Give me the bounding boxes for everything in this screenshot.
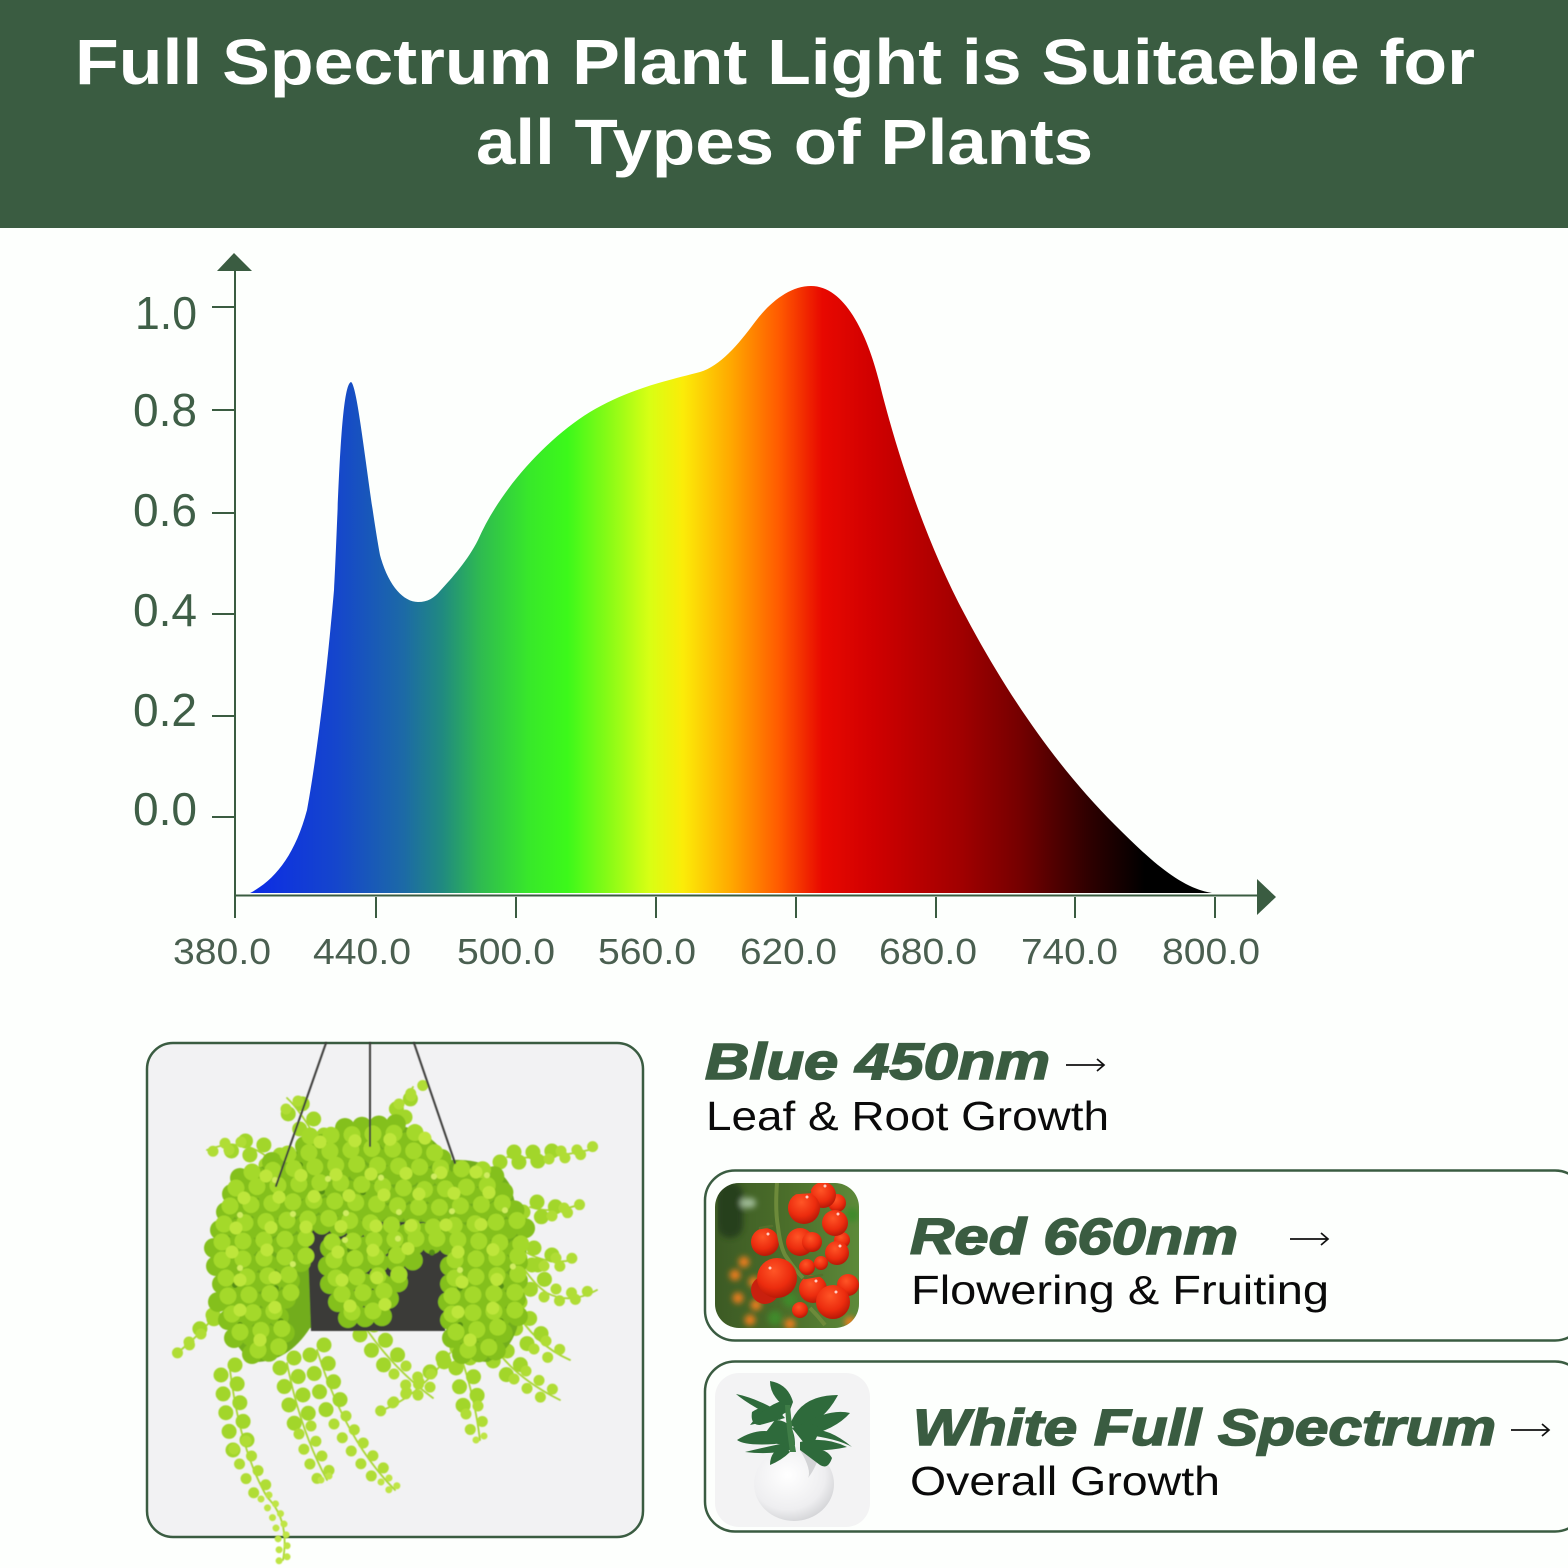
blue description: Leaf & Root Growth: [706, 1093, 1109, 1139]
x axis labels: [173, 931, 1260, 972]
x axis labels: 620.0: [740, 931, 837, 972]
title: Full Spectrum Plant Light is Suitaeble for: [75, 26, 1475, 98]
panel: hanging plant: [147, 1043, 643, 1562]
title: [75, 26, 1475, 178]
y axis with arrow and ticks: [212, 253, 252, 918]
foliage mass: [220, 1125, 521, 1362]
white description: Overall Growth: [910, 1458, 1220, 1504]
x axis labels: 560.0: [598, 931, 696, 972]
panel: red 660nm: [705, 1170, 1568, 1340]
base leaf layer: [214, 1124, 530, 1354]
x axis with arrow and ticks: [235, 879, 1276, 918]
y axis labels: 0.8: [133, 384, 197, 436]
pot: [307, 1222, 449, 1331]
x axis labels: 440.0: [313, 931, 411, 972]
y axis labels: 0.0: [133, 783, 197, 835]
x axis labels: 740.0: [1021, 931, 1118, 972]
header banner: [0, 0, 1568, 228]
y axis labels: 1.0: [135, 287, 197, 339]
y axis labels: 0.4: [133, 584, 197, 636]
y axis labels: 0.6: [133, 484, 197, 536]
trail leaves: [188, 1095, 565, 1450]
arrow: [1511, 1424, 1549, 1436]
hanger wires: [276, 1043, 455, 1186]
title: all Types of Plants: [476, 106, 1093, 178]
y axis labels: 0.2: [133, 684, 197, 736]
trailing stems: [178, 1087, 597, 1560]
x axis labels: 380.0: [173, 931, 271, 972]
y axis labels: [133, 287, 197, 835]
arrow: [1290, 1233, 1328, 1245]
red description: Flowering & Fruiting: [911, 1267, 1329, 1313]
shadow flecks: [235, 1165, 520, 1325]
spectrum chart: [133, 253, 1276, 972]
arrow: [1066, 1059, 1104, 1071]
white heading: White Full Spectrum: [913, 1399, 1496, 1456]
x axis labels: 800.0: [1162, 931, 1260, 972]
blue heading: Blue 450nm: [705, 1033, 1050, 1090]
highlight leaves: [232, 1138, 518, 1340]
red heading: Red 660nm: [910, 1208, 1238, 1265]
icon: tomatoes photo: [715, 1182, 859, 1328]
label: blue 450nm: [705, 1033, 1109, 1139]
icon: potted plant photo: [715, 1373, 870, 1527]
panel: white full spectrum: [705, 1362, 1568, 1532]
plant foliage and pot: [174, 1043, 602, 1562]
x axis labels: 500.0: [457, 931, 555, 972]
x axis labels: 680.0: [879, 931, 977, 972]
bright leaf layer: [222, 1132, 524, 1350]
spectrum curve: [250, 286, 1212, 893]
leaf glints: [240, 1175, 520, 1270]
